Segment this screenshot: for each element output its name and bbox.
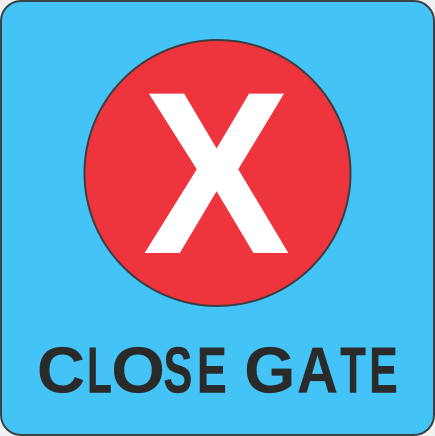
heading: CLOSE GATE: S — [164, 334, 192, 407]
heading: CLOSE GATE — [37, 334, 398, 407]
heading: CLOSE GATE: O — [111, 336, 165, 407]
heading: CLOSE GATE: G — [244, 334, 295, 407]
heading: CLOSE GATE: E — [197, 334, 227, 407]
icon: red circle with white X: X — [144, 46, 289, 301]
heading: CLOSE GATE: T — [340, 335, 366, 407]
heading: CLOSE GATE: A — [297, 334, 338, 407]
heading: CLOSE GATE: E — [369, 335, 398, 407]
heading: CLOSE GATE: C — [37, 335, 85, 406]
heading: CLOSE GATE: L — [87, 335, 112, 407]
